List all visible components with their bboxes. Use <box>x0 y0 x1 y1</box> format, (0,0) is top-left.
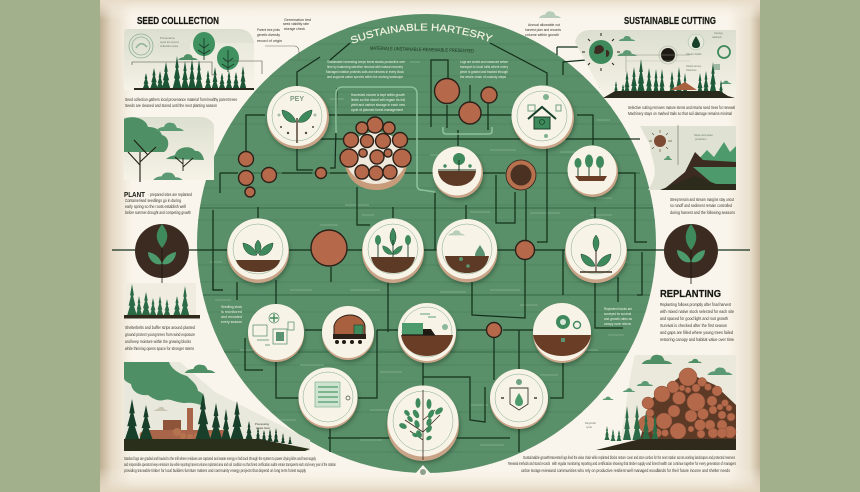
light green routed paths <box>336 87 492 192</box>
text block: replanting: restoring canopy and habitat value over time <box>660 337 735 342</box>
text block: top left notes: Parent tree plots <box>257 28 280 32</box>
text block: cutting caption <box>628 105 735 116</box>
text block: upper left on green: Managed rotation protects soils and streams in every block <box>326 70 404 74</box>
medallion: water drop card <box>490 369 548 429</box>
text block: bottom center right: Renewal methods and stand records <box>508 461 550 466</box>
text block: upper left on green: and supports native species within the working landscape <box>327 75 403 79</box>
medallion: PEY sprout <box>267 86 329 149</box>
text block: top left notes: Germination test <box>284 18 311 22</box>
text block: bottom right: Harvested logs feed the value chain while replanted blocks restore cover and store carbon for the next rotation across working landscapes and protected reserves <box>550 455 735 460</box>
medallion: sapling row 2 right <box>565 218 627 283</box>
bottom pointer <box>415 465 431 475</box>
text block: replanting: and gaps are filled where young trees failed <box>660 330 734 335</box>
text block: bottom left: Stacked logs are graded and hauled to the mill where residues are captured and waste energy is fed back through the system to power drying kilns and heat supply <box>124 456 317 461</box>
panel: log stack: cycle <box>586 425 592 429</box>
text block: lower right on green: surveyed for survival <box>604 312 631 316</box>
medallion: seedlings row 2 <box>362 218 424 283</box>
text block: lower left on green: every season <box>221 320 242 324</box>
panel: sustainable cutting forest <box>575 30 736 98</box>
panel: log stack: Regrowth <box>585 421 597 425</box>
icon: dark sprout circle right <box>664 224 718 284</box>
log: small row 2 <box>516 240 534 260</box>
text block: seed collection caption: Seed collection gathers local provenance material from healthy parent trees <box>125 97 237 102</box>
medallion: truck on field <box>398 303 456 363</box>
text block: top left notes: seed viability rate <box>283 22 309 26</box>
medallion: seedling in soil <box>432 146 483 198</box>
text block: Plant: before summer drought and competing growth <box>125 210 191 215</box>
text block: top left notes: genetic diversity <box>257 33 280 37</box>
panel: mill and smoke <box>124 362 310 451</box>
panel: seed collection forest <box>124 29 262 90</box>
text block: bottom right: and communities who rely on productive resilient well managed woodlands for their future income and shelter needs <box>550 468 730 473</box>
text block: hillside caption: Steep terrain and stream margins stay uncut <box>670 197 735 202</box>
text block: top right notes: Annual allowable cut <box>528 23 560 27</box>
icon: dark sprout circle left <box>135 224 189 283</box>
panel: log stack <box>585 355 736 450</box>
text block: log pile note: cycle of planned forest management <box>351 108 404 112</box>
small logs: top center <box>434 78 497 124</box>
diagram connector lines <box>112 43 750 460</box>
medallion: large tree <box>387 386 459 461</box>
ring log with dark core <box>506 160 536 190</box>
medallion: house <box>512 86 574 149</box>
text block: lower left on green: Seedling stock <box>221 305 242 309</box>
text block: lower left on green: and recorded <box>221 315 242 319</box>
text block: upper right on green: the whole chain of custody steps <box>460 75 506 79</box>
text block: firs caption: ground protect young trees from wind exposure <box>125 332 195 337</box>
text block: cutting caption: Selective cutting removes mature stems and retains seed trees for renewal <box>628 105 735 110</box>
text block: Plant: early spring so the roots establish well <box>125 204 186 209</box>
panel: mill and smoke: Processing <box>255 422 269 426</box>
text block: bottom left: and responsible operators keep emissions low while reporting harvest volume replanted area and soil condition so that forest certification audits remain transparent each and every year of the rotation <box>124 462 336 467</box>
text block: hillside caption: during harvest and the following seasons <box>670 210 735 215</box>
text block: hillside caption: so runoff and sediment remain controlled <box>670 203 732 208</box>
small logs: left cluster <box>238 152 326 197</box>
paper sheet <box>100 0 760 492</box>
subtitle: MATERIALS UNSTAINABLE-RENEWABLE PRESENTED <box>370 46 475 54</box>
panel: sun and hillside: Slope and water <box>694 133 713 137</box>
text block: top right notes <box>525 11 561 37</box>
text block: replanting <box>660 302 735 342</box>
text block: bottom left <box>124 456 336 473</box>
medallion: soil with drop row 2 <box>436 219 498 282</box>
panel: seed collection forest: Provenance <box>160 36 175 40</box>
text block: seed collection caption: Seeds are cleaned and stored until the next planting season <box>125 103 217 108</box>
text block: Plant: PLANT <box>124 192 146 199</box>
text block: bottom center right: Sustainable growth <box>523 455 550 460</box>
text block: lower left on green: is monitored <box>221 310 242 314</box>
text block: bottom right <box>550 455 736 473</box>
text block: hillside caption <box>670 197 735 215</box>
text block: firs caption <box>125 325 196 351</box>
text block: bottom right: with regular monitoring reporting and certification showing that timber supply and forest health can continue together for every generation of managers <box>552 461 736 466</box>
panel: young firs <box>124 283 200 318</box>
text block: replanting: Survival is checked after the first season <box>660 323 728 328</box>
panel: sustainable cutting forest: Stream buffer <box>686 52 702 56</box>
text block: upper right on green: Logs are sorted and measured before <box>460 60 508 64</box>
panel: sun and hillside: protection <box>695 137 707 141</box>
heading: Seed Collection: SEED COLLLECTION <box>137 16 219 27</box>
panel: trees <box>124 117 214 182</box>
log: small row 3 <box>486 322 502 338</box>
panel: sustainable cutting forest: Stand survey <box>686 64 702 68</box>
text block: bottom center right: carbon storage review <box>521 468 551 473</box>
text block: cutting caption: Machinery stays on marked trails so that soil damage remains minimal <box>628 111 732 116</box>
panel: sustainable cutting forest: Canopy <box>714 31 724 35</box>
text block: bottom left: providing traceable timber for local builders furniture makers and community energy projects that depend on long term forest supply <box>124 468 307 473</box>
text block: upper right on green: piece is graded and tracked through <box>460 70 508 74</box>
panel: sun and hillside <box>640 125 736 190</box>
text block: Plant <box>124 192 192 215</box>
panel: seed collection forest: collection area <box>160 44 178 48</box>
text block: replanting: with mixed native stock selected for each site <box>660 309 735 314</box>
text block: firs caption: and keep moisture within the growing blocks <box>125 339 191 344</box>
medallion: checklist document <box>298 368 358 428</box>
medallion: log cart <box>322 306 374 360</box>
text block: top right notes: volume within growth <box>525 33 559 37</box>
text block: lower right on green: Replanted blocks are <box>604 307 632 311</box>
text block: lower right on green: and growth rates as <box>604 317 632 321</box>
text block: lower left on green <box>221 305 242 324</box>
text block: seed collection caption <box>125 97 237 108</box>
panel: mill and smoke: waste heat <box>256 426 270 430</box>
text block: lower right on green <box>604 307 632 326</box>
text block: top left notes: storage check <box>284 27 305 31</box>
text block: upper left on green: time by balancing selective removal with natural recovery <box>327 65 403 69</box>
log pile in bowl <box>340 117 411 190</box>
panel: sustainable cutting forest: Selective <box>686 68 697 72</box>
text block: log pile note: limits so the stand will regain its full <box>351 98 405 102</box>
panel: seed collection forest: seed lot record <box>160 40 179 44</box>
medallion: sprout on soil row 2 <box>227 218 289 283</box>
title: Sustainable Hartesry: SUSTAINABLE HARTESRY <box>350 24 493 44</box>
panel: sustainable cutting forest: retained <box>712 35 722 39</box>
text block: Plant: - prepared sites are replanted <box>148 192 192 197</box>
text block: top left notes: record of origin <box>257 39 282 43</box>
panel: central green circle <box>190 14 660 473</box>
medallion: monitoring panels <box>248 304 304 362</box>
text block: log pile note: Harvested volume is kept within growth <box>351 93 405 97</box>
medallion: three trees <box>568 146 618 197</box>
text block: firs caption: Shelterbelts and buffer strips around planted <box>125 325 196 330</box>
text block: top right notes: harvest plan and records <box>525 28 561 32</box>
text block: upper left on green <box>326 60 406 79</box>
text block: log pile note <box>351 93 405 112</box>
text block: bottom center right <box>508 455 551 473</box>
text block: top left notes <box>257 18 311 60</box>
text block: replanting: and spaced for good light and root growth <box>660 316 729 321</box>
text block: Plant: Containerised seedlings go in during <box>125 198 181 203</box>
text block: log pile note: yield and carbon storage in each new <box>351 103 405 107</box>
medallion: soil with target <box>533 303 591 363</box>
medallion: PEY sprout: PEY <box>290 96 304 103</box>
text block: replanting: Replanting follows promptly after final harvest <box>660 302 732 307</box>
heading: Replanting: REPLANTING <box>660 289 721 300</box>
text block: upper right on green: transport to local mills where every <box>460 65 508 69</box>
text block: lower right on green: canopy cover returns <box>604 322 631 326</box>
log: large center left <box>311 230 347 266</box>
text block: upper left on green: Sustainable harvesting keeps forest stands productive over <box>327 60 406 64</box>
text block: upper right on green <box>460 60 508 79</box>
text block: firs caption: while thinning opens space for stronger stems <box>125 346 194 351</box>
heading: Sustainable Cutting: SUSTAINABLE CUTTING <box>624 16 716 27</box>
